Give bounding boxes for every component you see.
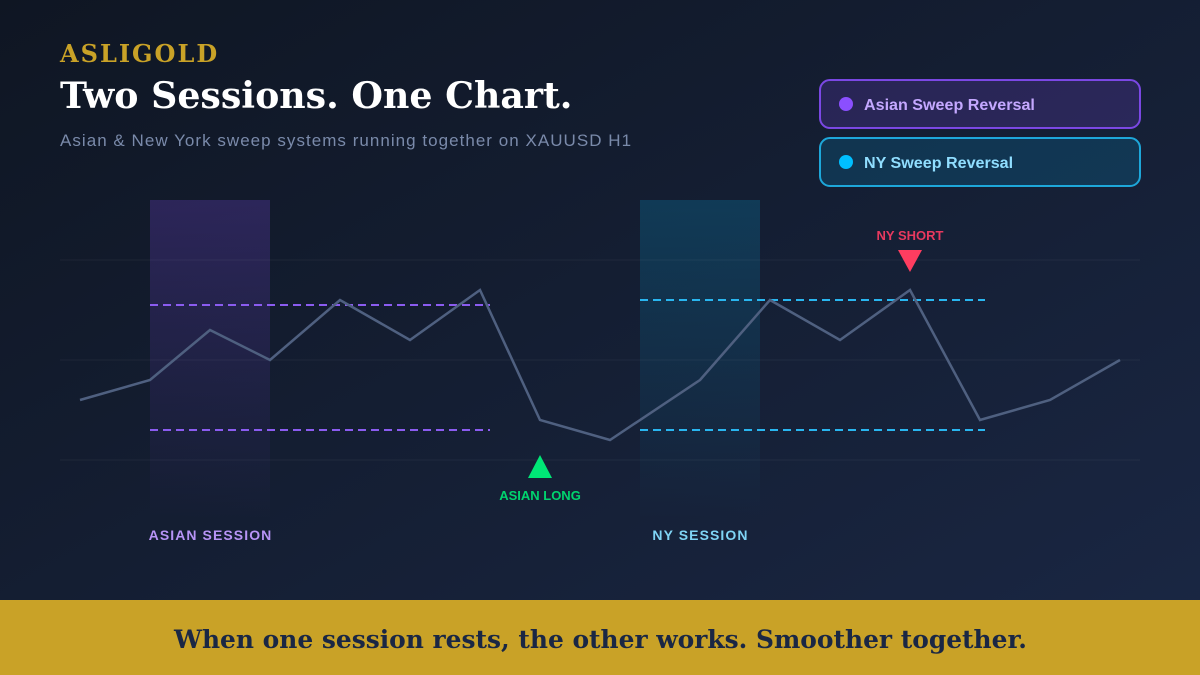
label: asian session: ASIAN SESSION (149, 527, 272, 543)
legend item: Asian Sweep Reversal (820, 80, 1140, 128)
legend item: Asian Sweep Reversal: Asian Sweep Reversal (864, 96, 1035, 114)
subtitle: Asian & New York sweep systems running together on XAUUSD H1 (60, 131, 632, 150)
asian range low line (150, 429, 490, 431)
asian range high line (150, 304, 490, 306)
footer banner (0, 600, 1200, 675)
chart (60, 200, 1140, 543)
label: ny session: NY SESSION (652, 527, 749, 543)
asian session band (150, 200, 270, 520)
ny range low line (640, 429, 985, 431)
price line (80, 290, 1120, 440)
marker: asian long: ASIAN LONG (499, 488, 581, 503)
legend (820, 80, 1140, 186)
ny range high line (640, 299, 985, 301)
brand name: ASLIGOLD (59, 39, 219, 68)
marker: ny short: NY SHORT (877, 228, 944, 243)
footer tagline: When one session rests, the other works. Smoother together. (173, 625, 1027, 654)
title: Two Sessions. One Chart. (60, 74, 572, 117)
ny session band (640, 200, 760, 520)
legend item: NY Sweep Reversal (820, 138, 1140, 186)
marker: asian long (499, 455, 581, 503)
marker: ny short (877, 228, 944, 272)
legend item: NY Sweep Reversal: NY Sweep Reversal (864, 154, 1013, 172)
